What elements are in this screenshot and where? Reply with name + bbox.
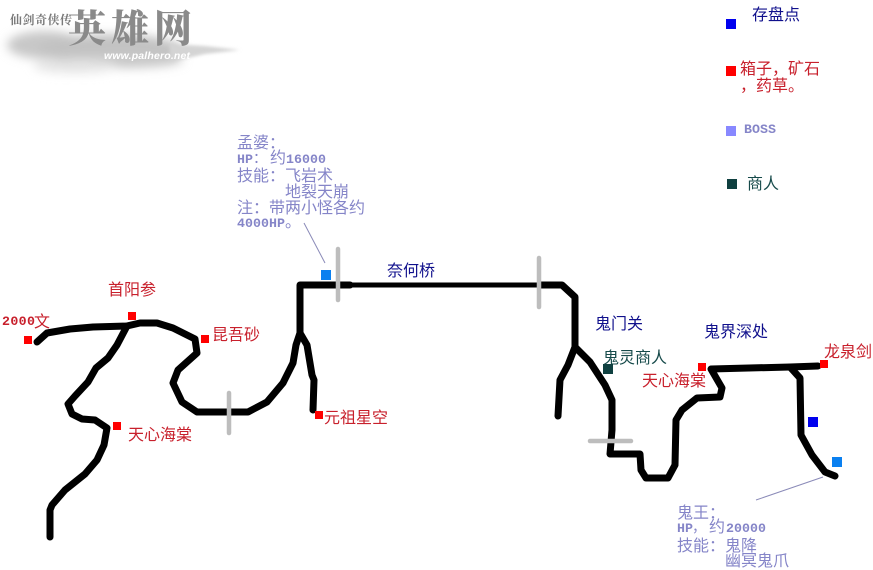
boss info: 孟婆: 4000HP	[237, 216, 285, 231]
place labels	[387, 262, 768, 367]
road: western section	[37, 323, 300, 412]
legend: chest, ore, herbs: ，药草。	[740, 77, 804, 95]
place labels: 鬼界深处	[704, 323, 768, 341]
save point marker	[808, 417, 818, 427]
boss info: 孟婆: 约	[270, 149, 286, 167]
legend: boss	[726, 122, 776, 137]
legend: merchant	[727, 175, 779, 193]
callout line: 孟婆	[304, 223, 325, 263]
gate: grey bar at bridge west	[336, 249, 340, 300]
road: final stretch to ghost king	[790, 367, 835, 476]
place labels: 鬼门关	[595, 315, 643, 333]
boss info: 鬼王: 技能：	[677, 537, 725, 555]
boss info: 孟婆: 技能：	[237, 167, 285, 185]
gate: grey bar at ghost gate	[590, 439, 631, 443]
item labels: 首阳参	[108, 281, 156, 299]
item labels: 天心海棠	[642, 372, 706, 390]
boss info: 孟婆: 注：带两小怪各约	[237, 199, 365, 217]
legend: chest, ore, herbs	[726, 60, 820, 95]
place labels: 奈何桥	[387, 262, 435, 280]
map road network	[37, 285, 835, 537]
boss info: 鬼王: HP	[677, 521, 693, 536]
item labels: 昆吾砂	[212, 326, 260, 344]
logo: 英雄网 ink brush banner	[7, 0, 240, 73]
boss info: 鬼王: 鬼降	[725, 537, 757, 555]
boss info: 鬼王: ，	[692, 519, 706, 535]
legend	[726, 5, 820, 193]
boss info: 孟婆	[237, 134, 365, 231]
item labels: 2000	[2, 314, 35, 329]
boss info: 孟婆: HP	[237, 152, 253, 167]
legend: save point: 存盘点	[752, 5, 800, 24]
boss info: 孟婆: 16000	[286, 152, 326, 167]
boss info: 孟婆: 地裂天崩	[285, 183, 349, 201]
boss info: 鬼王: 鬼王：	[677, 504, 725, 522]
boss info: 孟婆: 。	[285, 214, 301, 231]
boss info: 孟婆: 孟婆：	[237, 134, 285, 152]
road: southwest branch	[50, 326, 127, 537]
boss info: 鬼王	[677, 504, 789, 570]
logo url: www.palhero.net	[104, 50, 190, 62]
legend: boss: BOSS	[744, 122, 776, 137]
item labels	[2, 281, 872, 444]
item labels: 天心海棠	[128, 426, 192, 444]
road: ghost gate to deep section	[540, 285, 818, 478]
legend: chest, ore, herbs: 箱子，矿石	[740, 60, 820, 78]
callout line: 鬼王	[756, 477, 823, 500]
road: branch to 元祖星空	[300, 333, 314, 410]
legend: save point	[726, 5, 800, 29]
legend: merchant: 商人	[747, 175, 779, 193]
boss info: 孟婆: 飞岩术	[285, 167, 333, 185]
merchant marker	[603, 364, 613, 374]
item labels: 文	[34, 313, 50, 331]
item markers	[24, 312, 828, 430]
boss marker: 鬼王	[832, 457, 842, 467]
boss info: 孟婆: ：	[253, 150, 267, 166]
road: ghost gate branch	[558, 347, 575, 416]
boss info: 鬼王: 约	[709, 518, 725, 536]
boss info: 鬼王: 幽冥鬼爪	[725, 552, 789, 570]
gates	[229, 249, 631, 441]
gate: grey bar at 昆吾砂 road	[227, 393, 231, 433]
boss info: 鬼王: 20000	[726, 521, 766, 536]
gate: grey bar at bridge east	[537, 258, 541, 307]
item labels: 龙泉剑	[824, 343, 872, 361]
logo small caption: 仙剑奇侠传	[10, 11, 72, 28]
place labels: 鬼灵商人	[603, 349, 667, 367]
boss marker: 孟婆	[321, 270, 331, 280]
item labels: 元祖星空	[324, 409, 388, 427]
road: bridge	[300, 285, 350, 333]
